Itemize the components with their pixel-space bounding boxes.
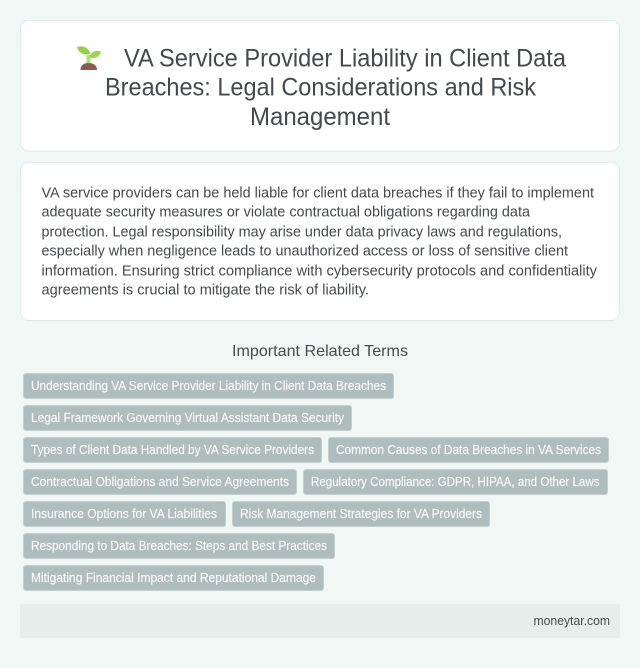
- tag: [24, 470, 296, 494]
- tag: [24, 406, 352, 430]
- tag: Insurance Options for VA Liabilities: [31, 506, 217, 521]
- tag group: related terms: [24, 374, 608, 590]
- summary text: especially when negligence leads to unauthorized access or loss of sensitive client: [42, 243, 569, 260]
- heading: Breaches: Legal Considerations and Risk: [105, 74, 536, 102]
- tag: [24, 502, 226, 526]
- tag: Regulatory Compliance: GDPR, HIPAA, and Other Laws: [311, 474, 600, 489]
- tag: [24, 374, 394, 398]
- panel: summary paragraph: [20, 162, 620, 320]
- heading: VA Service Provider Liability in Client Data: [124, 44, 566, 72]
- tag: [328, 438, 608, 462]
- tag: Understanding VA Service Provider Liability in Client Data Breaches: [31, 378, 386, 393]
- icon: seedling: [77, 46, 101, 70]
- tag: [232, 502, 490, 526]
- tag: Legal Framework Governing Virtual Assistant Data Security: [31, 410, 345, 425]
- heading: related terms: Important Related Terms: [232, 343, 408, 360]
- summary text: information. Ensuring strict compliance with cybersecurity protocols and confidentiality: [42, 262, 597, 279]
- footer bar: [20, 604, 620, 638]
- summary text: protection. Legal responsibility may arise under data privacy laws and regulations,: [42, 223, 562, 240]
- tag: Types of Client Data Handled by VA Service Providers: [31, 442, 314, 457]
- tag: [24, 566, 324, 590]
- tag: Common Causes of Data Breaches in VA Services: [336, 442, 601, 457]
- footer source text: moneytar.com: [534, 614, 610, 628]
- panel: title card: [20, 20, 620, 151]
- tag: Contractual Obligations and Service Agreements: [31, 474, 289, 489]
- tag: [24, 438, 322, 462]
- heading: [105, 44, 566, 131]
- tag: [304, 470, 608, 494]
- summary text: VA service providers can be held liable for client data breaches if they fail to implement: [42, 184, 595, 201]
- summary text: agreements is crucial to mitigate the risk of liability.: [42, 282, 369, 298]
- tag: Risk Management Strategies for VA Providers: [240, 506, 482, 521]
- tag: Responding to Data Breaches: Steps and Best Practices: [31, 538, 327, 553]
- heading: Management: [250, 103, 390, 131]
- summary text: adequate security measures or violate contractual obligations regarding data: [42, 204, 531, 221]
- summary text: [42, 184, 597, 298]
- tag: Mitigating Financial Impact and Reputational Damage: [31, 570, 316, 585]
- tag: [24, 534, 334, 558]
